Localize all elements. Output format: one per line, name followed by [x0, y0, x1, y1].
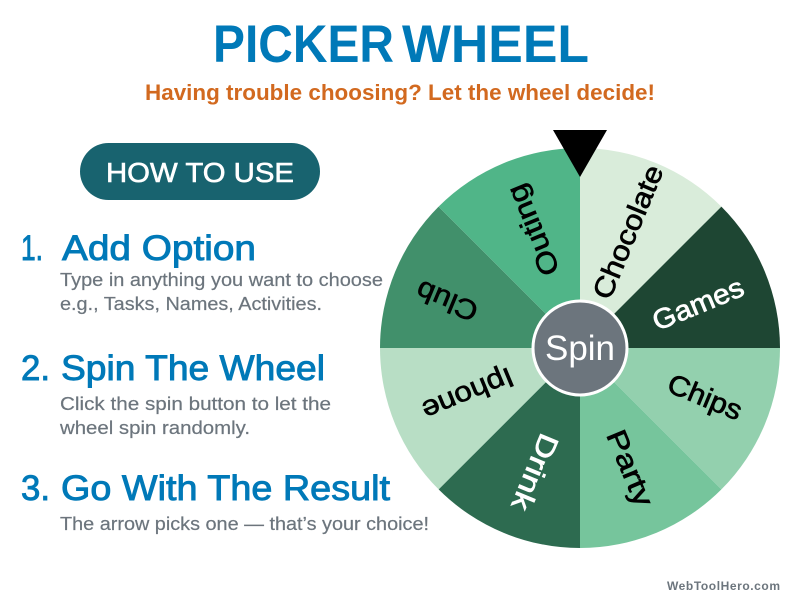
segment: Outing: [439, 148, 580, 348]
how to use badge: [80, 143, 320, 200]
segment: Iphone: [380, 348, 580, 489]
segment: Club: [380, 207, 580, 348]
subtitle: Having trouble choosing? Let the wheel decide!: [145, 80, 655, 105]
pointer arrow: [553, 130, 607, 177]
how to use badge: HOW TO USE: [106, 157, 294, 188]
step 1 heading: 1.: [21, 229, 43, 268]
step 3 heading: 3.: [21, 469, 50, 508]
label: Games: Games: [648, 271, 748, 337]
title: PICKER: [213, 15, 394, 74]
step 1 heading: Add Option: [62, 229, 256, 268]
step 2: [21, 349, 331, 438]
segment: Games: [580, 207, 780, 348]
segment: Chocolate: [580, 148, 721, 348]
label: Drink: Drink: [505, 429, 565, 516]
spin button: Spin: [545, 329, 615, 368]
step 2 heading: Spin The Wheel: [61, 349, 325, 388]
title: WHEEL: [402, 15, 589, 74]
segment: Party: [580, 348, 721, 548]
segment: Chips: [580, 348, 780, 489]
segment: Drink: [439, 348, 580, 548]
step 2 description: Click the spin button to let the: [60, 393, 331, 414]
step 1 description: Type in anything you want to choose: [60, 269, 383, 290]
spin button: [533, 301, 627, 395]
label: Chocolate: Chocolate: [587, 160, 669, 304]
step 3 description: The arrow picks one — that’s your choice!: [60, 513, 429, 534]
step 1 description: e.g., Tasks, Names, Activities.: [60, 293, 322, 314]
step 3 heading: Go With The Result: [61, 469, 390, 508]
step 3: [21, 469, 429, 534]
label: Iphone: Iphone: [418, 361, 518, 427]
step 2 heading: 2.: [21, 349, 50, 388]
footer credit: WebToolHero.com: [667, 579, 780, 593]
label: Outing: Outing: [500, 180, 566, 280]
label: Club: Club: [412, 274, 482, 328]
step 1: [21, 229, 383, 314]
step 2 description: wheel spin randomly.: [59, 417, 250, 438]
spinning wheel: [380, 148, 780, 548]
label: Party: Party: [600, 425, 660, 511]
label: Chips: Chips: [663, 368, 747, 426]
